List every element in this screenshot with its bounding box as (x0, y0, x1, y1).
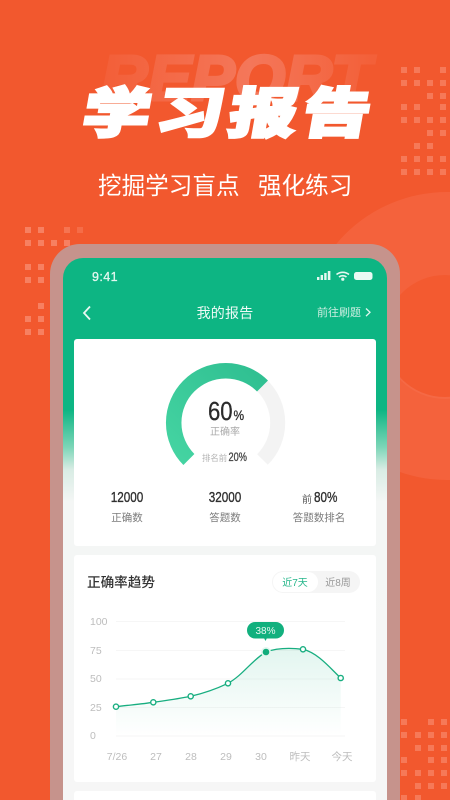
stat: ranking: 80% (314, 489, 337, 505)
decorative dots top right (401, 67, 446, 175)
trend line (116, 648, 341, 707)
stat: correct count (111, 489, 143, 524)
nav: back arrow (84, 306, 90, 320)
gauge rank (202, 452, 247, 464)
x axis labels: 今天 (332, 750, 353, 763)
gauge rank: 20% (228, 452, 247, 464)
background circles (336, 192, 450, 480)
subtitle second part: 强化练习 (258, 173, 352, 200)
active point (261, 647, 271, 657)
icon: link chevron (366, 308, 370, 316)
nav: link: 前往刷题 (317, 305, 361, 319)
title: 学习报告 (78, 84, 376, 145)
x axis labels: 27 (150, 751, 162, 763)
gauge value (174, 371, 262, 460)
stat: ranking: 答题数排名 (293, 511, 345, 524)
nav: title: 我的报告 (197, 305, 253, 321)
x axis labels: 28 (185, 751, 197, 763)
heading: 正确率趋势 (87, 574, 155, 590)
tooltip (247, 622, 284, 641)
grid lines (116, 622, 345, 736)
stat: answered count: 32000 (209, 489, 241, 505)
decorative dots left (25, 227, 83, 335)
gauge percent: % (234, 407, 244, 423)
watermark: REPORT: REPORT (101, 42, 376, 114)
decorative dots bottom right (401, 719, 447, 800)
x axis labels (107, 750, 353, 763)
gauge track (262, 386, 278, 460)
icon: signal (317, 271, 330, 280)
tooltip: 38% (255, 626, 276, 637)
y axis labels: 0 (90, 730, 96, 742)
stat: correct count: 12000 (111, 489, 143, 505)
y axis labels: 25 (90, 702, 102, 714)
toggle (272, 571, 360, 593)
y axis labels: 100 (90, 616, 108, 628)
subtitle: 挖掘学习盲点 (98, 173, 240, 200)
data points (113, 647, 343, 709)
phone frame (50, 244, 400, 800)
icon: battery (354, 272, 372, 280)
panel: trend card (74, 555, 376, 782)
gauge percent (208, 397, 244, 426)
y axis labels (90, 616, 108, 742)
panel: next card (74, 791, 376, 800)
phone screen (63, 258, 387, 800)
area under line (116, 648, 341, 736)
x axis labels: 30 (255, 751, 267, 763)
stat: ranking: 前 (302, 493, 312, 506)
x axis labels: 7/26 (107, 751, 127, 763)
x axis labels: 昨天 (290, 751, 311, 763)
status time: 9:41 (92, 270, 118, 284)
panel: summary card (74, 339, 376, 546)
stat: correct count: 正确数 (111, 511, 143, 524)
stat: answered count: 答题数 (209, 511, 241, 524)
stat: answered count (209, 489, 241, 524)
gauge percent: 60 (208, 397, 233, 426)
stat: ranking (293, 489, 345, 524)
icon: wifi (336, 272, 349, 280)
y axis labels: 50 (90, 673, 102, 685)
x axis labels: 29 (220, 751, 232, 763)
toggle: 近8周 (325, 576, 351, 589)
gauge label: 正确率 (210, 425, 240, 438)
gauge rank: 排名前 (202, 453, 227, 463)
toggle: 近7天 (282, 576, 308, 589)
status bar (92, 270, 372, 284)
y axis labels: 75 (90, 645, 102, 657)
